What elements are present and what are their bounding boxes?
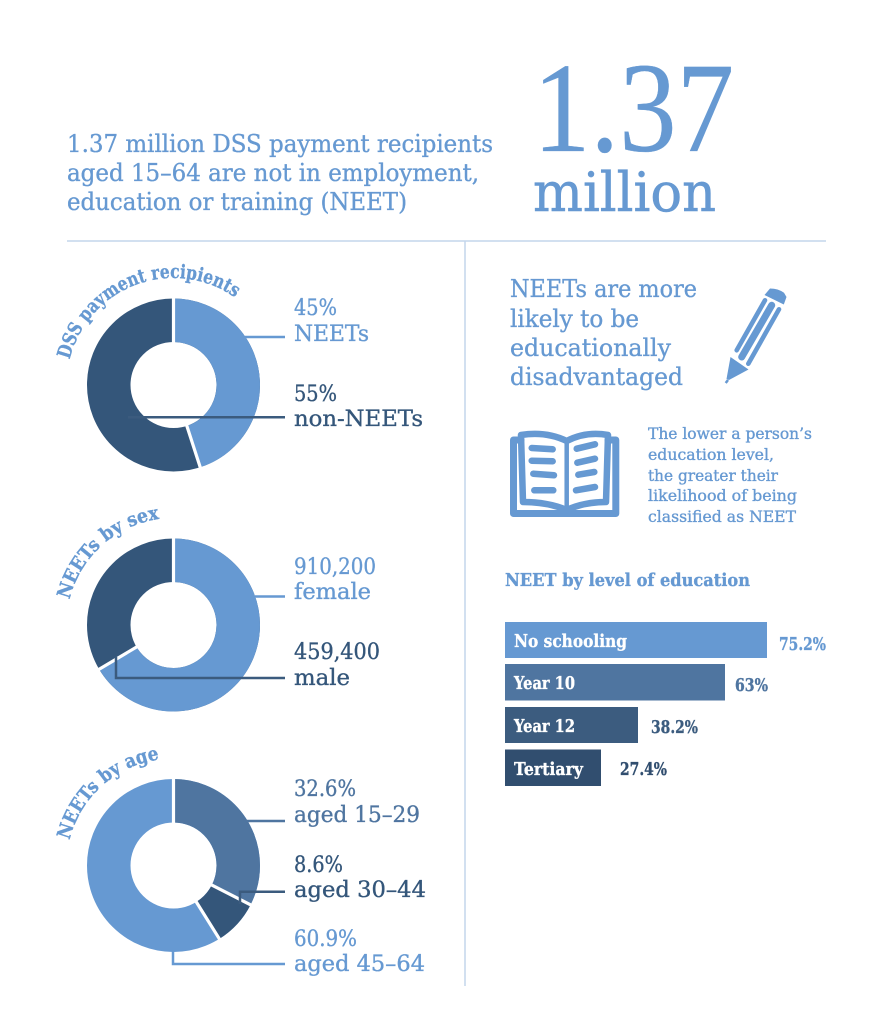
intro statement: aged 15–64 are not in employment, — [67, 159, 479, 187]
text block: lower education level: likelihood of being — [648, 486, 797, 505]
heading: NEETs are more likely to be educationally disadvantaged — [510, 275, 697, 391]
heading: NEETs are more likely to be educationally disadvantaged: NEETs are more — [510, 275, 697, 303]
bar: Year 10 63%: 63% — [735, 676, 768, 696]
chart title: NEETs by age: NEETs by age — [56, 750, 158, 840]
label: 8.6% aged 30–44 — [294, 853, 426, 903]
donut chart: NEETs by sex — [56, 508, 380, 712]
label: 60.9% aged 45–64: aged 45–64 — [294, 952, 425, 977]
bar: Year 12 38.2% — [505, 707, 698, 743]
text block: lower education level — [648, 424, 812, 526]
label: 32.6% aged 15–29: aged 15–29 — [294, 803, 420, 828]
label: 60.9% aged 45–64: 60.9% — [294, 927, 357, 952]
label: 55% non-NEETs — [294, 382, 423, 432]
label: 910,200 female: 910,200 — [294, 555, 376, 580]
icon: pencil — [726, 288, 786, 383]
label: 910,200 female: female — [294, 580, 371, 605]
bar: Year 10 63% — [505, 664, 768, 700]
label: 459,400 male: male — [294, 666, 350, 691]
bar: Tertiary 27.4%: 27.4% — [620, 760, 667, 780]
donut chart: NEETs by age — [56, 750, 426, 977]
bar: No schooling 75.2% — [505, 622, 826, 658]
label: 45% NEETs: 45% — [294, 296, 337, 321]
bar: No schooling 75.2%: 75.2% — [779, 635, 826, 655]
bar: Tertiary 27.4% — [505, 750, 667, 786]
label: 55% non-NEETs: 55% — [294, 382, 337, 407]
bar: Year 12 38.2%: 38.2% — [651, 718, 698, 738]
headline figure: 1.37 million: million — [533, 161, 716, 224]
heading: NEETs are more likely to be educationally disadvantaged: educationally — [510, 334, 671, 362]
bar chart heading: NEET by level of education — [505, 570, 750, 591]
icon: open book — [514, 434, 616, 514]
heading: NEETs are more likely to be educationally disadvantaged: likely to be — [510, 305, 639, 333]
label: 45% NEETs — [294, 296, 369, 347]
label: 60.9% aged 45–64 — [294, 927, 425, 977]
label: 459,400 male: 459,400 — [294, 640, 380, 665]
label: 32.6% aged 15–29 — [294, 777, 420, 828]
label: 910,200 female — [294, 555, 376, 605]
label: 8.6% aged 30–44: aged 30–44 — [294, 878, 426, 903]
bar chart: NEET by level of education — [505, 622, 826, 786]
bar: Year 12 38.2%: Year 12 — [513, 716, 575, 737]
headline figure: 1.37 million: 1.37 — [533, 37, 734, 179]
label: 45% NEETs: NEETs — [294, 322, 369, 347]
donut chart: DSS payment recipients — [56, 264, 423, 472]
label: 459,400 male — [294, 640, 380, 691]
intro statement — [67, 130, 493, 216]
heading: NEETs are more likely to be educationally disadvantaged: disadvantaged — [510, 363, 683, 391]
label: 55% non-NEETs: non-NEETs — [294, 407, 423, 432]
text block: lower education level: classified as NEET — [648, 507, 796, 526]
chart title: DSS payment recipients: DSS payment recipients — [56, 264, 240, 360]
intro statement: education or training (NEET) — [67, 188, 407, 216]
bar: No schooling 75.2%: No schooling — [514, 631, 627, 652]
bar: Year 10 63%: Year 10 — [513, 673, 575, 694]
label: 32.6% aged 15–29: 32.6% — [294, 777, 356, 802]
text block: lower education level: The lower a person’s — [648, 424, 812, 443]
label: 8.6% aged 30–44: 8.6% — [294, 853, 343, 878]
text block: lower education level: the greater their — [648, 466, 778, 485]
text block: lower education level: education level, — [648, 445, 774, 464]
chart title: NEETs by sex: NEETs by sex — [56, 508, 160, 600]
headline figure: 1.37 million — [533, 37, 734, 224]
intro statement: 1.37 million DSS payment recipients — [67, 130, 493, 158]
bar: Tertiary 27.4%: Tertiary — [514, 759, 583, 780]
